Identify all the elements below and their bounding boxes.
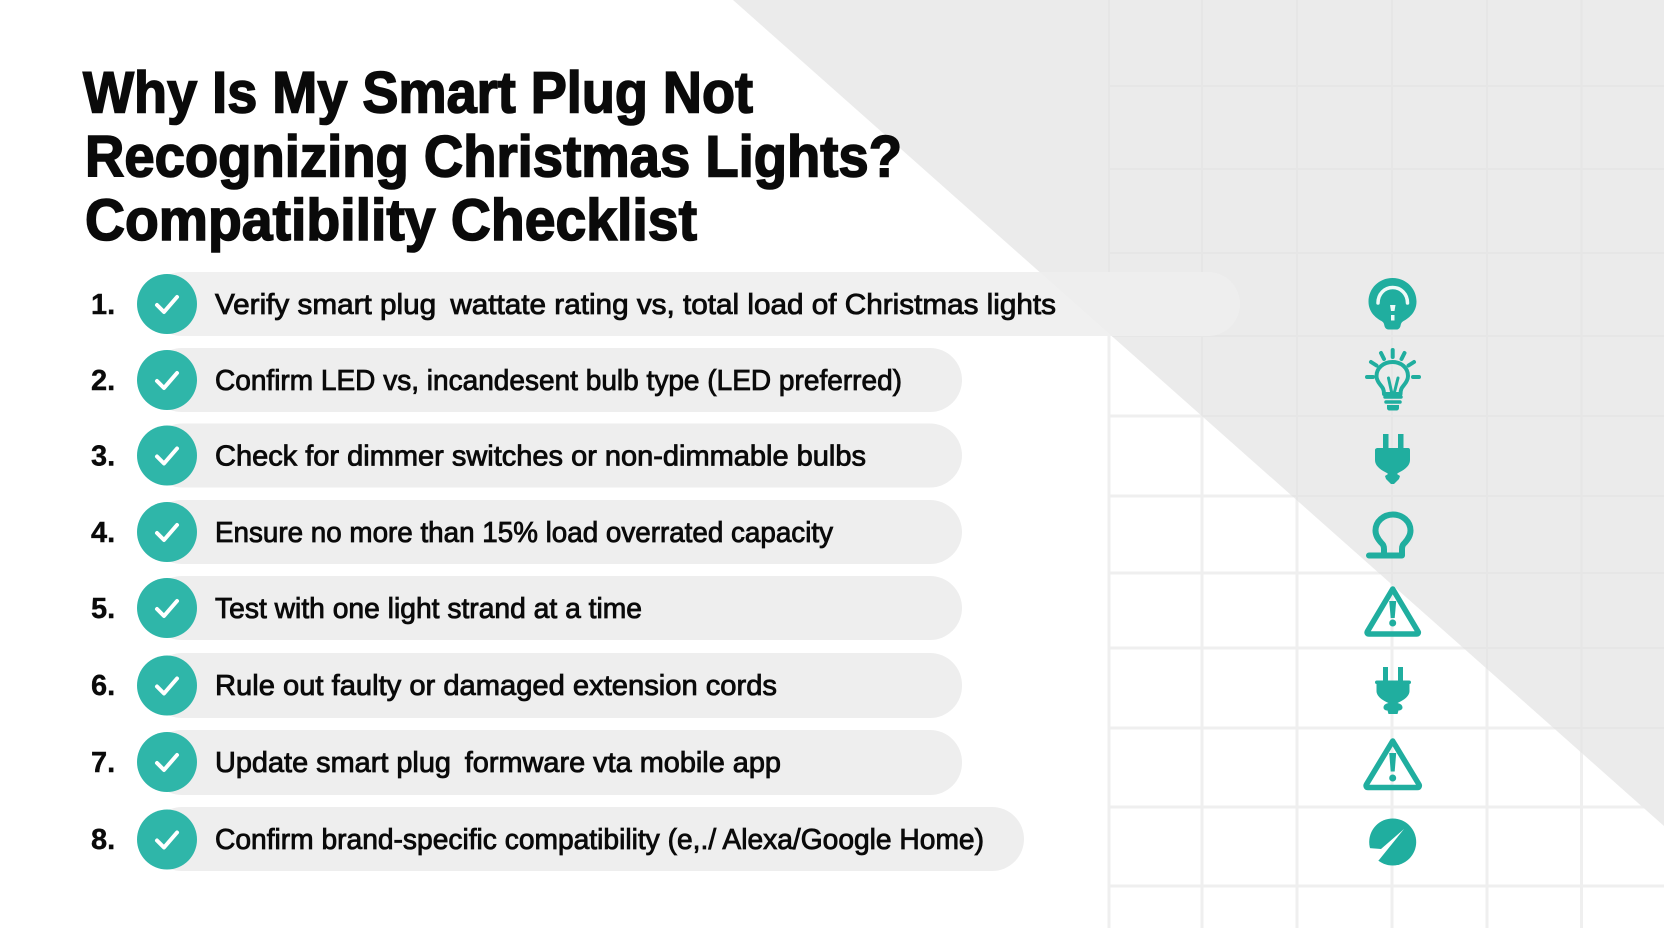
checklist item 5: 5. [91, 593, 115, 625]
checklist item 1 [91, 272, 1240, 336]
icon: bulb outline with base line [1369, 514, 1410, 556]
checklist item 8: 8. [91, 824, 115, 856]
icon: slashed circle [1358, 818, 1416, 868]
title: Why Is My Smart Plug Not [83, 60, 753, 126]
checklist item 3 [91, 424, 962, 488]
checklist item 2: Confirm LED vs, incandesent bulb type (LED preferred) [215, 365, 902, 397]
icon: light bulb with rays [1367, 350, 1419, 410]
checklist item 7 [91, 730, 962, 795]
icon: plug [1375, 667, 1411, 714]
checklist item 5 [91, 576, 962, 640]
title: Compatibility Checklist [85, 188, 697, 253]
checklist item 8: Confirm brand-specific compatibility (e,./ Alexa/Google Home) [215, 824, 984, 856]
checklist item 8 [91, 807, 1024, 871]
checklist item 3: Check for dimmer switches or non-dimmable bulbs [215, 440, 866, 472]
checklist item 4 [91, 500, 962, 564]
checklist item 7: 7. [91, 747, 115, 779]
checklist item 3: 3. [91, 440, 115, 472]
checklist item 1: 1. [91, 289, 115, 321]
checklist item 1: Verify smart plug wattate rating vs, total load of Christmas lights [215, 289, 1056, 321]
checklist item 4: 4. [91, 517, 115, 549]
checklist item 5: Test with one light strand at a time [215, 593, 642, 625]
title [83, 60, 902, 253]
checklist item 6 [91, 653, 962, 718]
checklist item 6: Rule out faulty or damaged extension cords [215, 670, 777, 702]
icon: solid bulb [1368, 278, 1416, 330]
icon: warning triangle [1366, 741, 1419, 788]
checklist item 4: Ensure no more than 15% load overrated capacity [215, 517, 834, 549]
background diagonal panel [733, 0, 1664, 826]
title: Recognizing Christmas Lights? [85, 124, 902, 190]
icon: plug [1375, 434, 1410, 484]
checklist item 7: Update smart plug formware vta mobile app [215, 747, 781, 779]
checklist item 2: 2. [91, 365, 115, 397]
checklist item 2 [91, 348, 962, 412]
checklist item 6: 6. [91, 670, 115, 702]
icon: warning triangle [1367, 589, 1418, 634]
